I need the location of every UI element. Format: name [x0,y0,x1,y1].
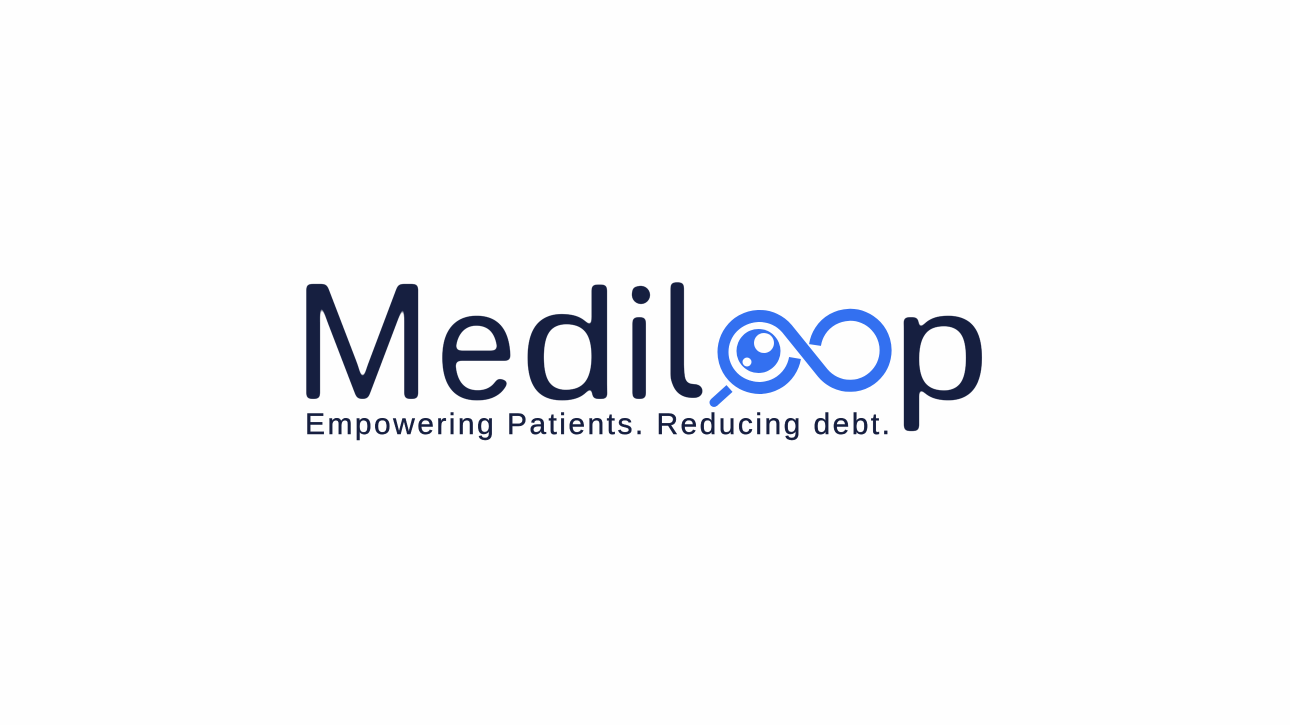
eye [736,329,780,373]
wordmark: Medil: e [436,259,517,432]
wordmark: Medil: l [660,257,694,409]
lens [728,322,788,382]
wordmark: Medil: d [520,255,619,433]
tail of letter l [678,372,696,391]
wordmark: p: p [892,259,989,433]
wordmark: Medil: i [622,259,656,432]
dot of letter i [632,286,650,304]
magnifier handle [714,388,730,402]
infinity strand [724,315,886,388]
wordmark: Medil [292,248,989,435]
icon: infinity loop with magnifying glass eye [710,315,886,407]
tagline: Empowering Patients. Reducing debt. [305,408,890,441]
wordmark: Medil: M [292,248,432,435]
